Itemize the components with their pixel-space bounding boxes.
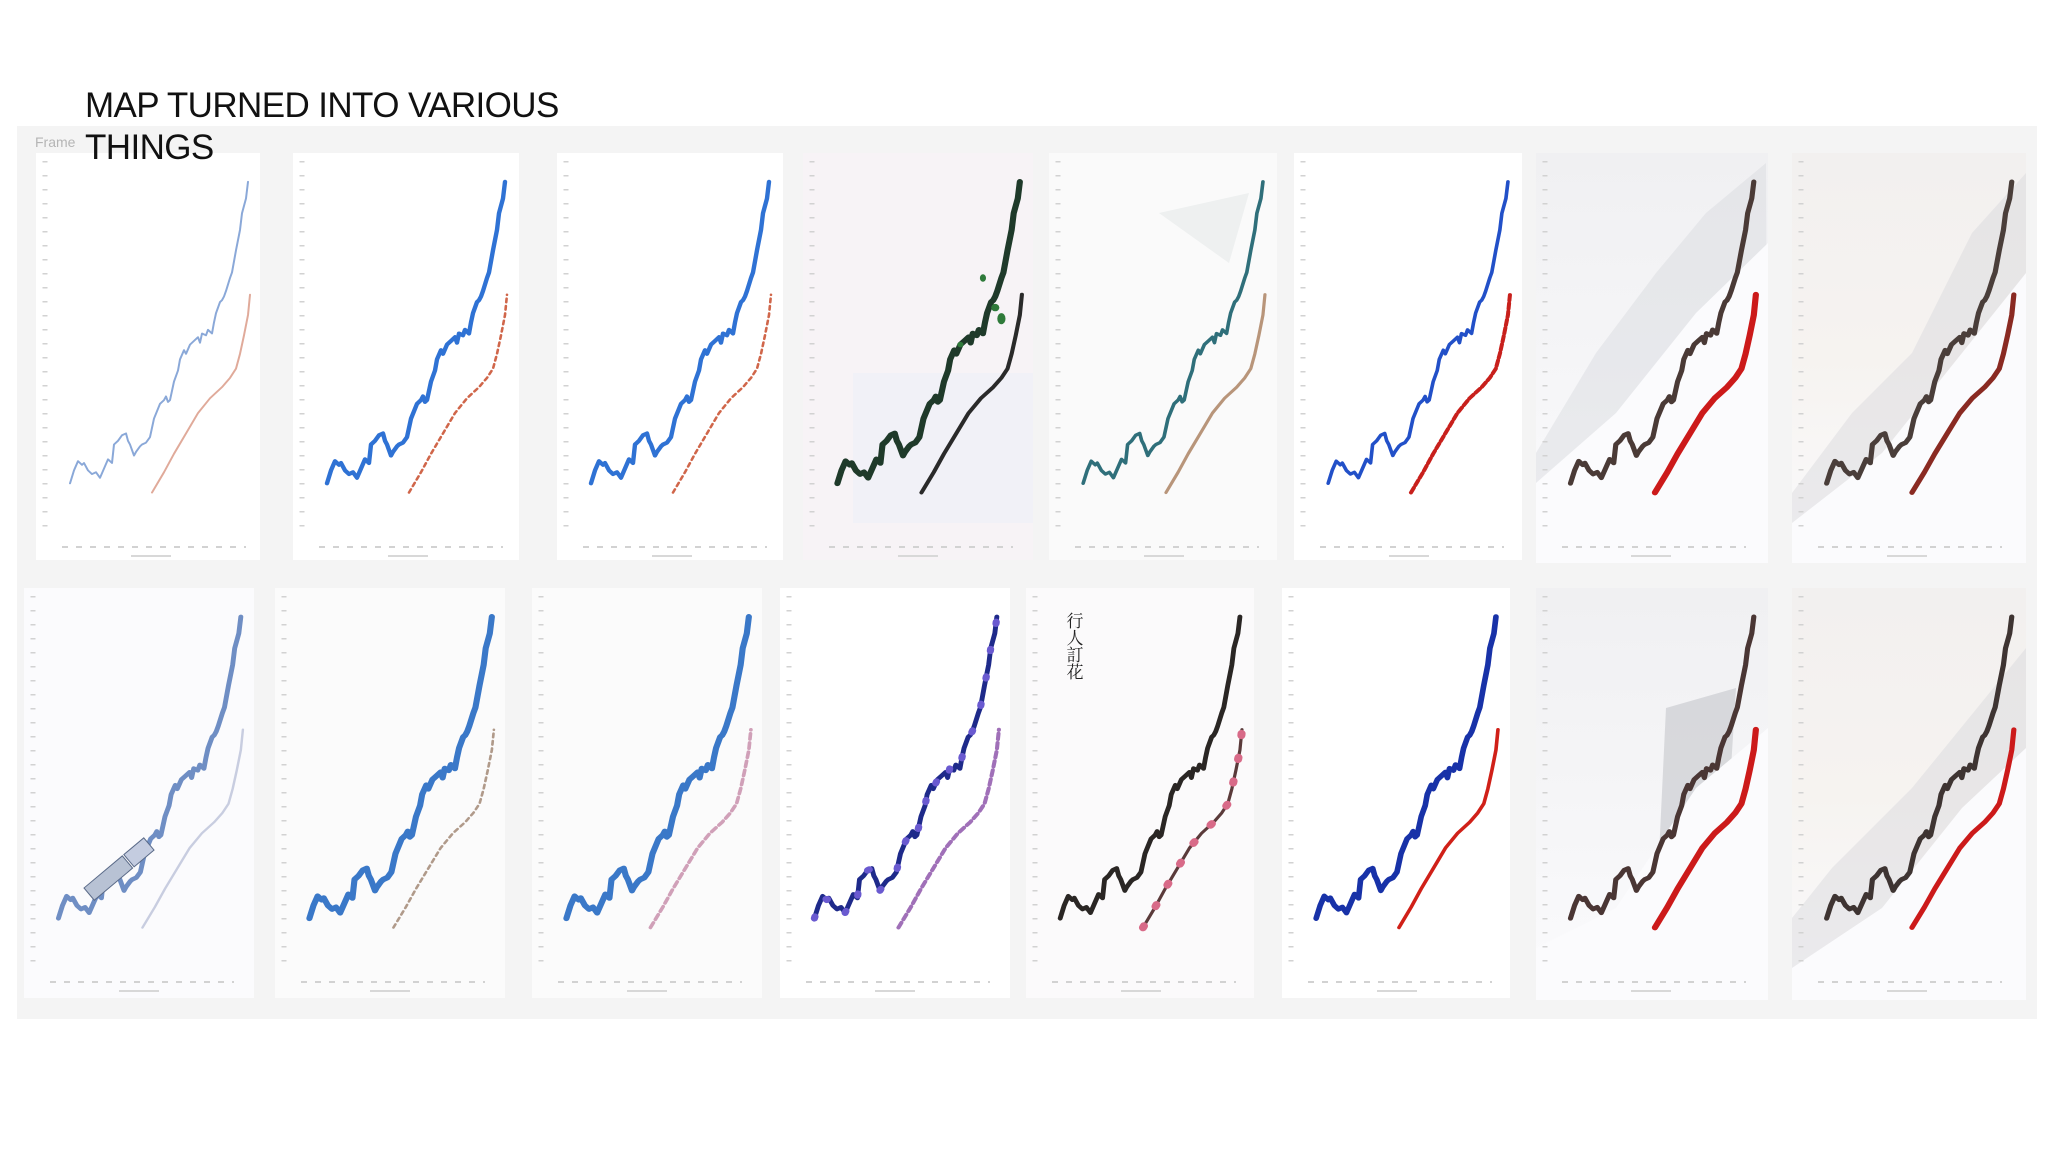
panel: row2 chart 7 snow mountain xyxy=(1536,588,1768,1000)
panel: row1 chart 7 snow mountain xyxy=(1536,153,1768,563)
panel: frame background xyxy=(17,126,2037,1019)
panel: row1 chart 8 snow mountain xyxy=(1792,153,2026,563)
panel: row2 chart 6 dark blue red xyxy=(1282,588,1510,998)
panel: row2 chart 5 ink branch with plum blossoms xyxy=(1026,588,1254,998)
icon: train xyxy=(84,838,154,900)
title: MAP TURNED INTO VARIOUS xyxy=(85,86,559,125)
panel: row2 chart 8 snow mountain xyxy=(1792,588,2026,1000)
panel: row2 chart 3 blue with flowers xyxy=(532,588,762,998)
panel: row2 chart 1 light blue with train xyxy=(24,588,254,998)
panel: row1 chart 3 blue xyxy=(557,153,783,560)
panel: row1 chart 4 green branch xyxy=(803,153,1033,560)
title: THINGS xyxy=(85,128,214,167)
panel: row2 chart 2 blue xyxy=(275,588,505,998)
panel: row2 chart 4 dark blue purple flowers xyxy=(780,588,1010,998)
frame label: Frame xyxy=(35,134,75,150)
panel: row1 chart 2 blue xyxy=(293,153,519,560)
text: chinese calligraphy: 行人訂花 xyxy=(1064,612,1083,680)
panel: row1 chart 1 thin lines xyxy=(36,153,260,560)
title xyxy=(85,86,559,167)
panel: row1 chart 5 teal watercolor xyxy=(1049,153,1277,560)
panel: row1 chart 6 blue red xyxy=(1294,153,1522,560)
